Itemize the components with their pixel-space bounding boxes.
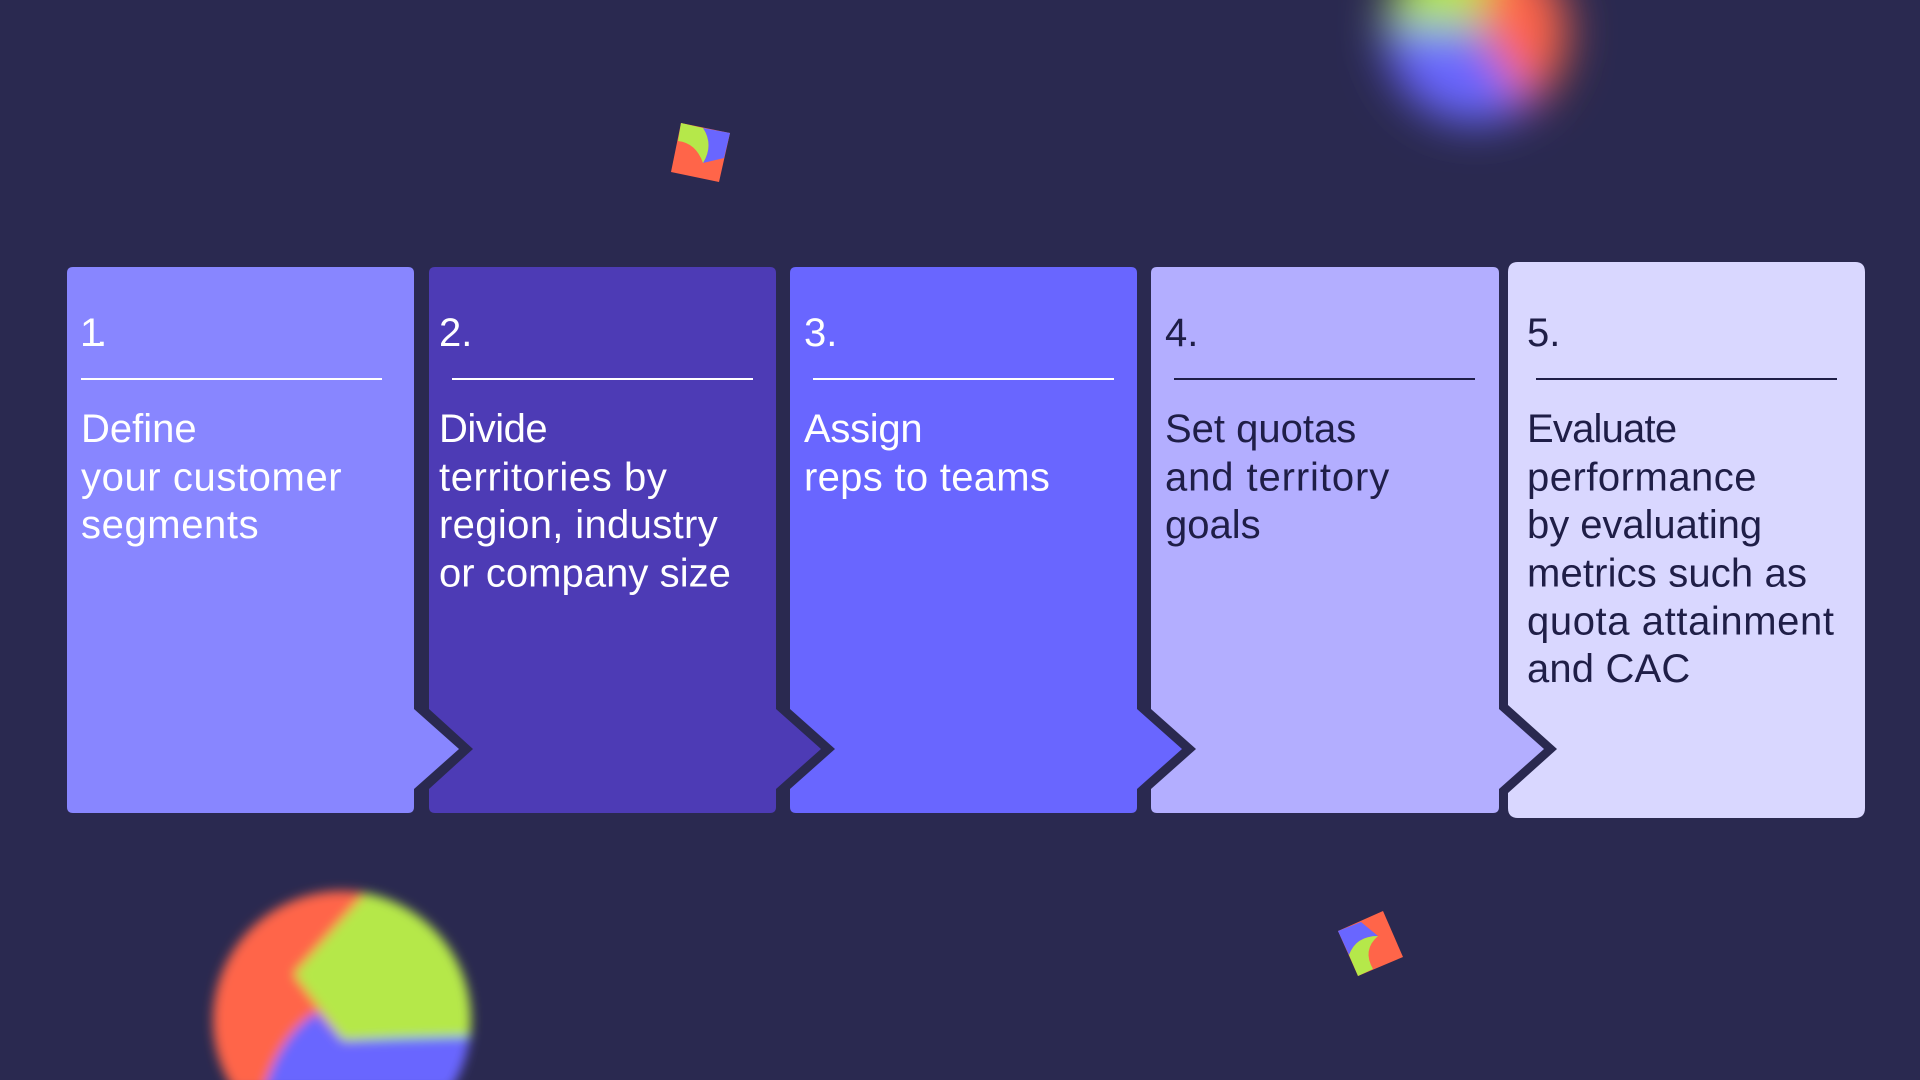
panel: step 1: [67, 267, 459, 813]
step 5 text: by evaluating: [1527, 503, 1762, 547]
step 3 text: reps to teams: [804, 456, 1050, 500]
step 4 text: goals: [1165, 503, 1261, 547]
step 5 number: 5.: [1527, 311, 1560, 355]
panel: step 5: [1508, 262, 1865, 818]
icon: small square bottom: [1338, 911, 1403, 976]
step 5 background: [1508, 262, 1865, 818]
step 2 background arrow shape: [429, 267, 821, 813]
panel: step 4: [1151, 267, 1544, 813]
step 3 text: Assign: [804, 407, 922, 451]
step 2 number: 2.: [439, 311, 472, 355]
step 5 text: Evaluate: [1527, 407, 1676, 451]
step 5 text: quota attainment: [1527, 600, 1835, 644]
step 4 number: 4.: [1165, 311, 1198, 355]
step 2 text: region, industry: [439, 503, 718, 547]
step 4 text: Set quotas: [1165, 407, 1356, 451]
icon: small square top: [671, 123, 730, 182]
panel: step 2: [429, 267, 821, 813]
step 3 background arrow shape: [790, 267, 1182, 813]
step 1 text: segments: [81, 503, 259, 547]
step 4 background arrow shape: [1151, 267, 1544, 813]
step 3 number: 3.: [804, 311, 837, 355]
step 1 text: your customer: [81, 456, 342, 500]
step 5 text: and CAC: [1527, 647, 1690, 691]
step 1 text: Define: [81, 407, 197, 451]
step 1 number: 1.: [80, 311, 104, 355]
step 1 background arrow shape: [67, 267, 459, 813]
step 4 text: and territory: [1165, 456, 1390, 500]
step 2 text: Divide: [439, 407, 547, 451]
step 2 text: territories by: [439, 456, 667, 500]
blurred pie decoration: top right: [1370, 0, 1580, 130]
panel: step 3: [790, 267, 1182, 813]
blurred pie decoration: bottom left: [200, 880, 490, 1080]
step 2 text: or company size: [439, 552, 731, 596]
step 5 text: performance: [1527, 456, 1757, 500]
step 5 text: metrics such as: [1527, 552, 1807, 596]
